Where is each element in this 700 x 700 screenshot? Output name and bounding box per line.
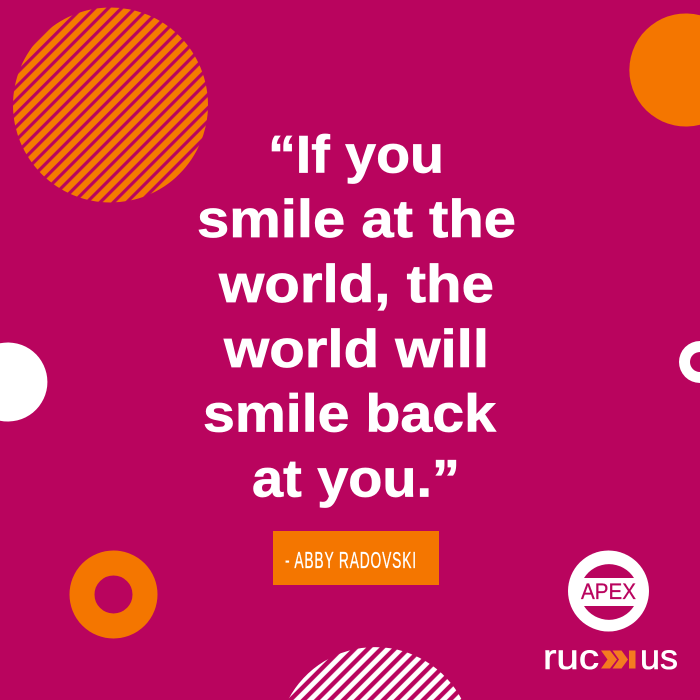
APEX logo <box>568 550 649 632</box>
quote text <box>197 126 516 508</box>
white circle left <box>0 342 47 422</box>
striped white circle bottom <box>288 647 462 700</box>
solid orange circle top right <box>629 14 700 126</box>
quote text: world will <box>223 320 489 379</box>
quote text: world, the <box>218 255 494 314</box>
ruckus logo: ruc <box>543 638 599 677</box>
quote text: smile back <box>203 384 497 444</box>
white ring right <box>679 341 700 383</box>
quote text: “If you <box>268 126 444 184</box>
APEX logo: APEX <box>581 579 636 604</box>
quote text: at you.” <box>252 450 460 508</box>
orange ring bottom left <box>82 563 145 626</box>
striped orange circle <box>13 8 208 202</box>
quote text: smile at the <box>197 190 516 249</box>
ruckus logo: us <box>640 638 678 677</box>
attribution badge <box>273 531 439 585</box>
ruckus logo <box>543 638 678 677</box>
attribution badge: - ABBY RADOVSKI <box>285 549 417 574</box>
